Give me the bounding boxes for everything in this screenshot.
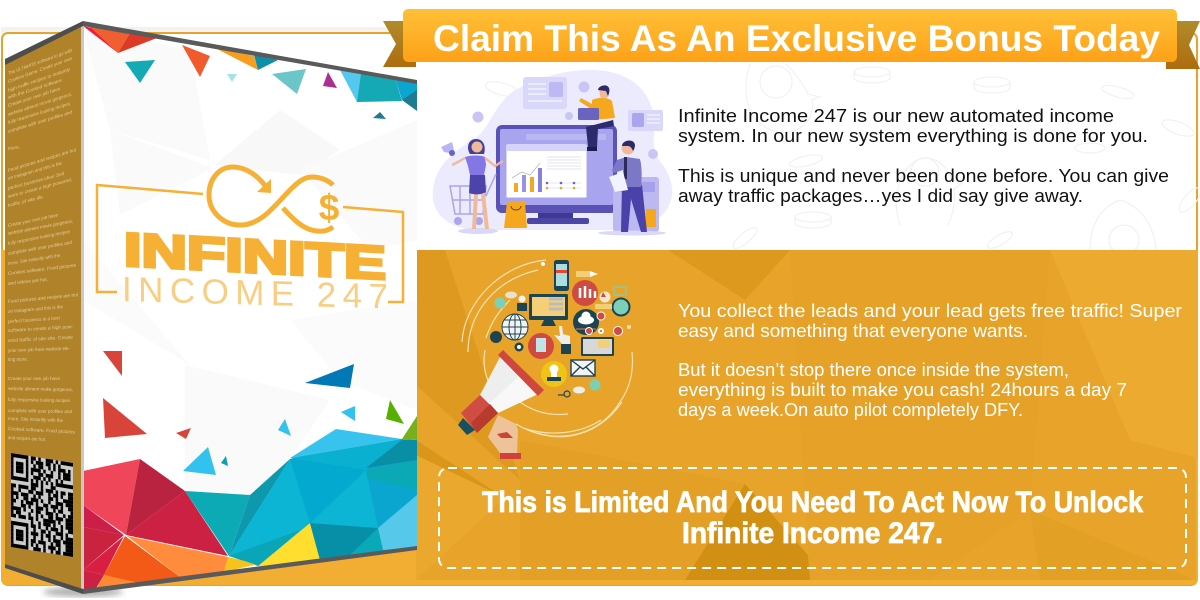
spine fine print: fully responsive looking recipes — [8, 397, 71, 404]
spine fine print: complete with user profiles and — [8, 109, 72, 135]
man with phone and clipboard — [598, 141, 666, 236]
spine fine print: Create your own job have — [8, 212, 58, 229]
woman with megaphone — [441, 139, 503, 234]
polygon art at bottom of box — [83, 416, 417, 591]
spine fine print: complete with user profiles and — [8, 240, 72, 257]
spine fine print: ting more. — [8, 357, 28, 363]
spine fine print: more. Site instantly with the — [8, 416, 63, 424]
spine fine print: website aliment movie gorgeous, — [8, 218, 73, 237]
text block: intro copy: Infinite Income 247 is our new automated income — [678, 106, 1114, 126]
globe icon — [502, 314, 528, 340]
spine fine print: website aliment make gorgeous, — [8, 386, 73, 393]
box edges — [5, 21, 417, 594]
banner: heading: Claim This As An Exclusive Bonus Today — [433, 18, 1160, 59]
QR code — [11, 453, 73, 557]
small round icons — [472, 82, 658, 159]
spine fine print: on Instagram and this is the — [8, 304, 63, 315]
spine fine print: more. — [8, 144, 20, 152]
red document circle — [528, 333, 554, 359]
spine fine print: and recipes are hot. — [8, 435, 46, 443]
callout: limited offer — [439, 468, 1186, 568]
text block: details copy: days a week.On auto pilot completely DFY. — [678, 400, 1023, 420]
text block: intro copy — [678, 106, 1169, 206]
magnifier icon — [595, 298, 630, 316]
yellow lightbulb circle — [541, 361, 567, 387]
illustration: online marketing team — [433, 70, 672, 236]
text block: details copy: But it doesn’t stop there once inside the system, — [678, 360, 1069, 380]
logo: infinity mark and frame: $ — [319, 187, 340, 228]
spine fine print: your own job have website ele- — [8, 346, 70, 354]
banner ribbon tails — [383, 21, 1200, 69]
cloud circle — [573, 309, 599, 335]
text block: details copy — [678, 301, 1182, 420]
text block: intro copy: system. In our new system everything is done for you. — [678, 126, 1148, 146]
spine fine print: Food pictures and recipes are hot — [8, 292, 79, 305]
spine fine print: high traffic recipes to instantly — [8, 67, 71, 94]
bar chart circle — [572, 280, 598, 306]
spine fine print: ered traffic of site site. Create — [8, 335, 73, 344]
panel: white intro background with coin pattern — [416, 62, 1200, 255]
pointing hand — [554, 326, 571, 354]
text block: details copy: everything is built to make you cash! 24hours a day 7 — [678, 380, 1127, 400]
spine fine print: website aliment movie gorgeous, — [8, 91, 72, 118]
megaphone — [458, 350, 544, 435]
card with cart — [523, 77, 567, 109]
spine fine print: Cookies Game. Create your own — [8, 56, 72, 85]
spine fine print: complete with user profiles and — [8, 408, 72, 415]
spine fine print: traffic of site ills. — [8, 194, 44, 209]
spine fine print: Food pictures and recipes are hot — [8, 147, 77, 174]
spine fine print: Cookies software. Food pictures — [8, 263, 77, 277]
phone icon — [554, 260, 569, 291]
speech bubbles and dark icons — [490, 292, 600, 397]
desktop monitor — [496, 125, 617, 224]
spine fine print: software to create a high pow- — [8, 324, 73, 334]
text block: details copy: You collect the leads and your lead gets free traffic! Super — [678, 301, 1182, 321]
spine fine print: Cooked software. Food pictures — [8, 426, 76, 436]
spine fine print: and videos are hot. — [8, 277, 48, 287]
box spine — [5, 26, 84, 590]
pencil icon — [576, 271, 598, 277]
top triangles — [83, 26, 417, 119]
product box — [5, 21, 417, 597]
calculator — [613, 177, 659, 232]
spine fine print: Create your own job have — [8, 376, 60, 382]
spine fine print: Create your own job have — [8, 86, 60, 109]
logo: infinity mark and frame — [97, 167, 403, 302]
spine fine print: ware to create a high powered, — [8, 177, 72, 200]
callout: limited offer: Infinite Income 247. — [682, 517, 943, 550]
box front face — [83, 24, 417, 591]
network nodes — [586, 312, 622, 336]
text block: details copy: easy and something that everyone wants. — [678, 321, 1028, 341]
text block: intro copy: This is unique and never been done before. You can give — [678, 166, 1169, 186]
panel: orange lower background — [1, 250, 1198, 585]
man sitting with laptop — [578, 85, 615, 151]
mail and pie icons — [600, 287, 626, 302]
card small — [628, 110, 663, 131]
text block: intro copy: away traffic packages…yes I did say give away. — [678, 186, 1083, 206]
floating triangles — [103, 351, 404, 475]
envelope icon — [571, 360, 595, 376]
tablet icon — [581, 337, 614, 356]
shopping bag — [504, 202, 527, 228]
spine fine print: fully responsive looking recipes — [8, 101, 70, 126]
spine fine print: The ULTIMATE software to go with — [8, 48, 72, 77]
spine fine print: with the Cooked software. — [8, 77, 63, 101]
spine fine print: perfect business idea! Sell — [8, 171, 64, 192]
spine fine print: perfect business in a box! — [8, 315, 60, 325]
illustration: megaphone with marketing icons — [458, 260, 632, 459]
monitor icon — [529, 294, 568, 326]
spine fine print: on Instagram and this is the — [8, 161, 62, 182]
spine fine print — [8, 48, 79, 443]
hand holding megaphone — [488, 415, 521, 459]
logo wordmark: INFINITE: INFINITE — [124, 223, 386, 289]
spine fine print: fully responsive looking recipes — [8, 229, 71, 247]
logo wordmark: INCOME 247: INCOME 247 — [122, 270, 388, 316]
spine fine print: more. Site instantly with the — [8, 253, 60, 267]
